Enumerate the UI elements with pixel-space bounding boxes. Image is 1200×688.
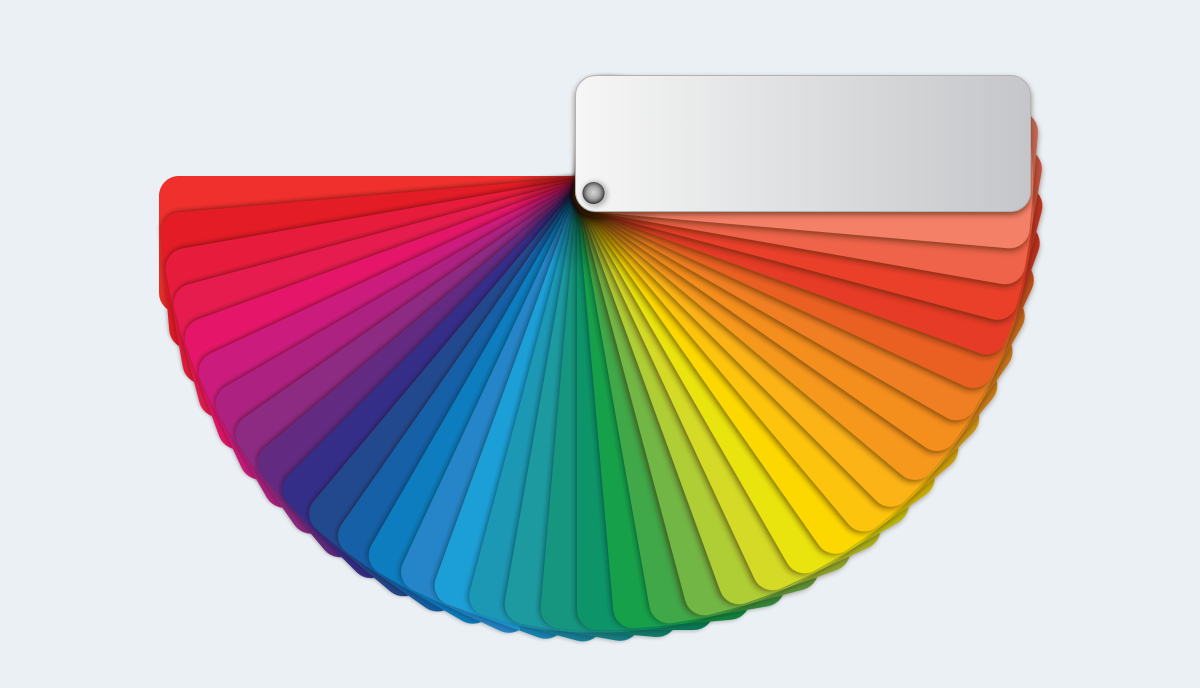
swatch: lime [581, 215, 851, 608]
swatch: rose red [170, 178, 575, 418]
swatch: purple [254, 189, 570, 559]
swatch: golden yellow [588, 216, 960, 538]
swatch: tomato [596, 192, 1046, 326]
swatch: teal [500, 206, 638, 644]
swatch: deep red [158, 173, 575, 348]
swatch: sky blue [430, 201, 572, 641]
swatch: dark orange [596, 216, 1028, 427]
swatch: salmon [574, 74, 1040, 250]
fan underlay right: darker card corners peeking out [520, 74, 1046, 644]
swatch: navy [306, 194, 570, 598]
swatch: vermilion [598, 214, 1043, 361]
swatch: magenta [196, 182, 574, 481]
swatch: green [576, 213, 749, 630]
swatch: deep magenta [212, 183, 572, 509]
icon: rivet [582, 181, 608, 207]
swatch: red [159, 176, 615, 313]
swatch: orange [594, 217, 1015, 458]
swatch: blue [364, 198, 571, 626]
top card: silver blank [576, 76, 1030, 212]
swatch: cerulean [464, 204, 597, 644]
swatch: crimson [162, 175, 575, 384]
swatch: jade [577, 174, 714, 630]
swatch: coral [572, 73, 1045, 287]
infographic: colour fan deck [158, 72, 1046, 644]
swatch: light orange [592, 217, 1000, 486]
swatch: rose [182, 180, 574, 450]
swatch: grass green [577, 214, 818, 620]
swatch: amber [590, 217, 981, 513]
swatch: leaf green [578, 214, 784, 626]
fan underlay left: card corners peeking out [158, 176, 520, 635]
swatch: lemon [584, 216, 910, 578]
swatch: indigo [279, 191, 570, 580]
swatch: plum [232, 186, 572, 536]
swatch: yellow [586, 216, 936, 559]
swatch: mid blue [396, 200, 572, 635]
swatch: red orange [597, 216, 1036, 394]
colour swatch fan [159, 73, 1047, 646]
swatch: royal blue [334, 196, 570, 614]
shadow at fan hub [513, 125, 663, 275]
swatch: sea green [536, 208, 675, 640]
swatch: yellow green [582, 216, 882, 595]
